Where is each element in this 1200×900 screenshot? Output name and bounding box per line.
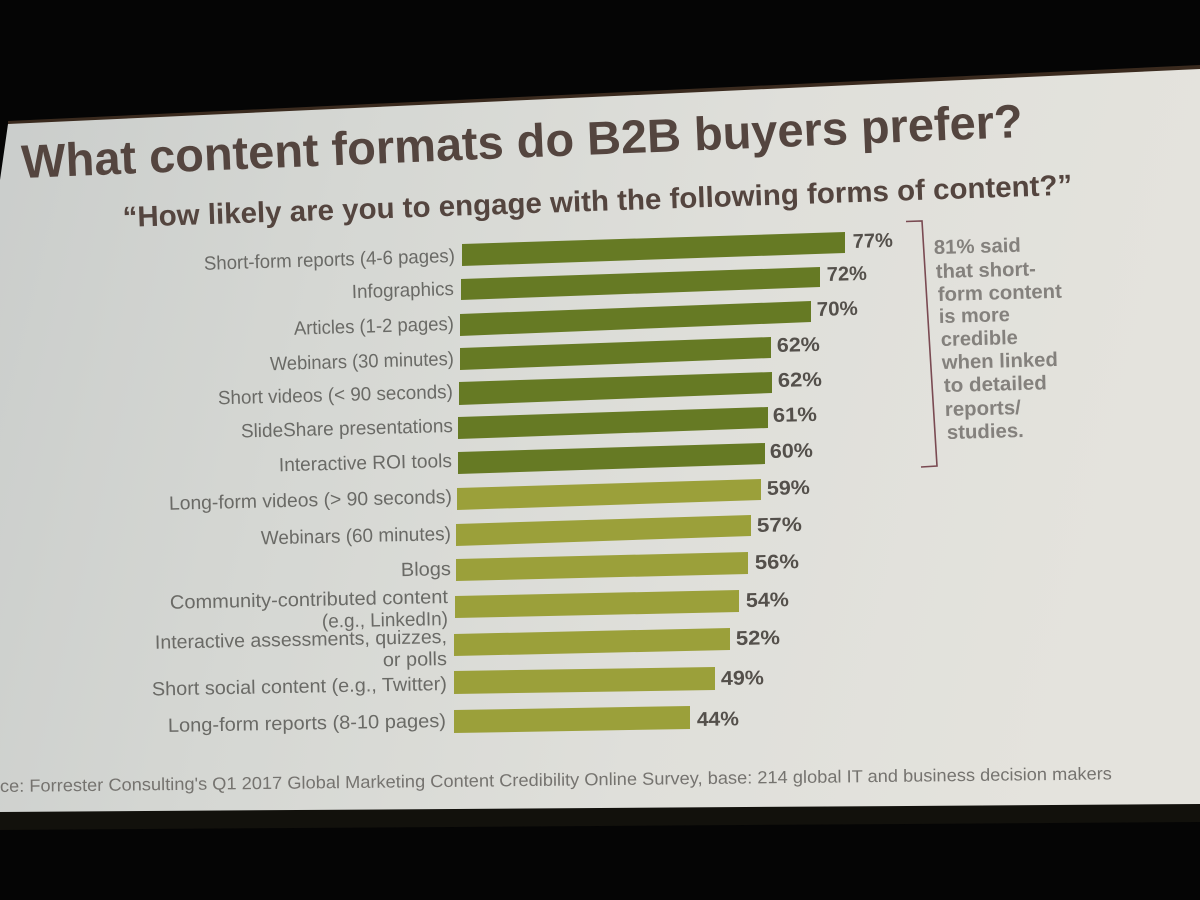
callout text: when linked — [941, 349, 1058, 374]
upper screen frame edge — [8, 65, 1200, 125]
bracket around top seven formats — [906, 221, 937, 467]
value labels: 61% — [773, 404, 817, 427]
value labels: 57% — [757, 514, 802, 537]
value labels: 44% — [697, 708, 739, 731]
category labels — [152, 246, 455, 737]
callout text: 81% said — [934, 235, 1021, 259]
category labels: Webinars (60 minutes) — [261, 524, 451, 549]
value labels: 70% — [816, 298, 858, 321]
value labels: 54% — [746, 589, 789, 612]
lower screen frame band — [0, 804, 1200, 830]
callout text — [934, 235, 1062, 444]
subtitle question: “How likely are you to engage with the following forms of content?” — [122, 170, 1073, 234]
category labels: Long-form videos (> 90 seconds) — [169, 487, 452, 515]
value labels: 77% — [852, 230, 893, 253]
category labels: SlideShare presentations — [241, 416, 453, 443]
category labels: Infographics — [352, 279, 454, 303]
category labels: Articles (1-2 pages) — [294, 314, 454, 340]
callout text: is more — [939, 304, 1010, 328]
category labels: (e.g., LinkedIn) — [322, 609, 448, 633]
bar chart — [152, 230, 893, 737]
category labels: Long-form reports (8-10 pages) — [168, 711, 446, 737]
value labels: 49% — [721, 667, 764, 690]
callout text: studies. — [947, 420, 1024, 444]
value labels: 62% — [777, 334, 820, 357]
value labels: 59% — [767, 477, 810, 500]
category labels: Short videos (< 90 seconds) — [218, 382, 453, 409]
bars: lower seven formats — [454, 479, 761, 733]
value labels: 56% — [755, 551, 799, 574]
value labels: 62% — [778, 369, 822, 392]
source note: ce: Forrester Consulting's Q1 2017 Global Marketing Content Credibility Online Survey, base: 214 global IT and business decision makers — [0, 763, 1112, 796]
callout text: to detailed — [944, 372, 1047, 397]
callout text: form content — [938, 281, 1062, 306]
category labels: Community-contributed content — [170, 587, 449, 614]
category labels: Short social content (e.g., Twitter) — [152, 674, 447, 700]
category labels: or polls — [383, 649, 447, 671]
category labels: Blogs — [401, 559, 451, 581]
callout text: that short- — [936, 258, 1036, 283]
value labels: 60% — [770, 440, 813, 463]
category labels: Interactive ROI tools — [279, 451, 452, 476]
title: What content formats do B2B buyers prefer? — [20, 94, 1024, 188]
category labels: Short-form reports (4-6 pages) — [204, 246, 455, 275]
value labels: 72% — [826, 263, 867, 286]
value labels — [697, 230, 893, 731]
callout text: credible — [941, 327, 1018, 351]
bars: top seven formats — [458, 232, 845, 474]
callout text: reports/ — [945, 397, 1022, 421]
value labels: 52% — [736, 627, 780, 650]
category labels: Webinars (30 minutes) — [270, 349, 454, 375]
category labels: Interactive assessments, quizzes, — [155, 627, 447, 654]
